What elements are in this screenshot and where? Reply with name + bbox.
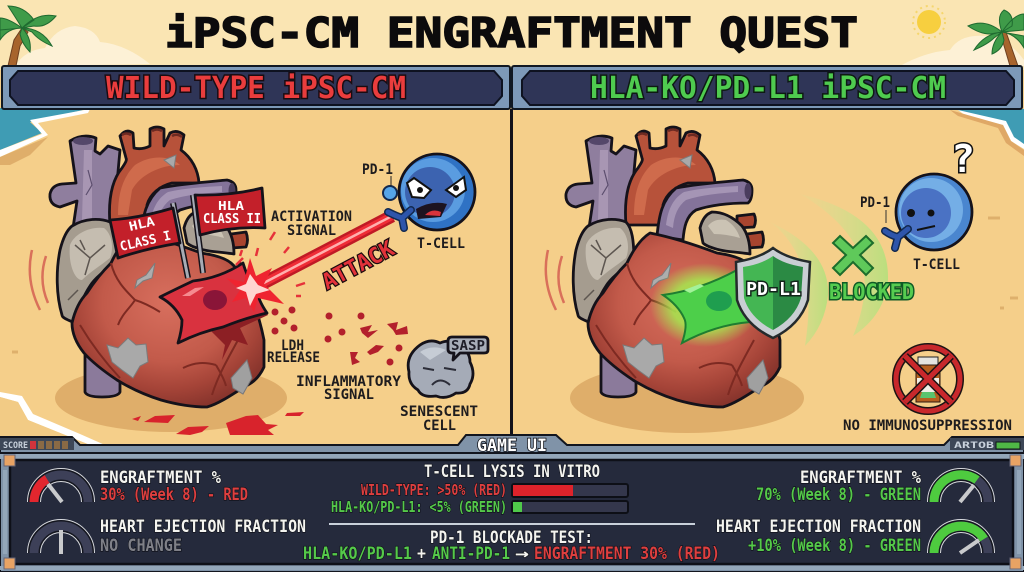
label: senescent cell: CELL (423, 418, 456, 434)
title: iPSC-CM ENGRAFTMENT QUEST (165, 9, 858, 57)
divider (329, 523, 695, 525)
text: engraftment HLA-KO (756, 468, 922, 505)
PD-1 blockade test: ANTI-PD-1 (432, 544, 510, 564)
text: engraftment wild-type: 30% (Week 8) - RED (100, 485, 248, 505)
tab: game UI: GAME UI (477, 436, 547, 456)
green shield waves (770, 194, 888, 346)
gauge: engraftment wild-type (34, 475, 88, 502)
senescent cell with SASP bubble (408, 337, 488, 397)
label: LDH release: LDH (281, 338, 304, 354)
ground shadow (55, 364, 287, 432)
label: senescent cell (400, 404, 478, 434)
label: PD-1: PD-1 (860, 195, 890, 211)
HLA flags: CLASS I (119, 229, 173, 255)
panel: HLA-KO/PD-L1 scene (546, 127, 1012, 434)
text: ejection fraction wild-type (100, 517, 306, 556)
HLA flags: CLASS II (203, 212, 261, 227)
red splats (132, 412, 304, 435)
HLA flags: HLA (218, 198, 245, 213)
PD-1 blockade test (303, 528, 720, 564)
heading: HLA-KO/PD-L1 iPSC-CM: HLA-KO/PD-L1 iPSC-CM (590, 71, 946, 106)
T-cell: angry (383, 154, 475, 230)
text: engraftment HLA-KO: ENGRAFTMENT % (800, 468, 922, 488)
text: engraftment wild-type (100, 468, 248, 505)
UI frame (0, 435, 1024, 572)
gauge: engraftment HLA-KO (934, 475, 988, 502)
score indicator (3, 441, 68, 451)
damaged red cardiomyocyte (160, 263, 267, 343)
artoo indicator (954, 441, 1020, 451)
panel header: HLA-KO/PD-L1 (512, 66, 1022, 109)
label: activation signal: SIGNAL (287, 223, 336, 239)
gauge: ejection fraction wild-type (34, 526, 88, 554)
text: ejection fraction HLA-KO: +10% (Week 8) - GREEN (748, 536, 921, 556)
label: T-cell: T-CELL (417, 236, 465, 252)
panel: wild-type scene (30, 127, 488, 435)
lysis chart (331, 462, 628, 516)
senescent cell with SASP bubble: SASP (451, 339, 485, 354)
PD-1 blockade test: PD-1 BLOCKADE TEST: (430, 528, 593, 548)
heart: healed (546, 127, 780, 407)
text: ejection fraction HLA-KO: HEART EJECTION FRACTION (716, 517, 921, 537)
label: inflammatory signal: INFLAMMATORY (296, 374, 402, 390)
label: no immunosuppression: NO IMMUNOSUPPRESSION (843, 418, 1012, 434)
label: LDH release: RELEASE (267, 350, 320, 366)
game UI panel (0, 435, 1024, 572)
panel divider (510, 109, 513, 436)
question mark: ? (951, 137, 975, 181)
PD-1 blockade test: + (417, 544, 426, 564)
attack label: ATTACK (318, 236, 399, 295)
ground shadow (570, 363, 804, 433)
LDH and inflammatory particles (272, 306, 408, 366)
PD-1 blockade test: ENGRAFTMENT 30% (RED) (534, 544, 720, 564)
palm tree left (0, 6, 56, 66)
lysis chart: WILD-TYPE: >50% (RED) (361, 481, 507, 499)
lysis chart: T-CELL LYSIS IN VITRO (424, 462, 600, 482)
heart: damaged (30, 127, 264, 407)
green cardiomyocyte (650, 263, 760, 347)
green X (833, 236, 873, 275)
PD-1 blockade test: HLA-KO/PD-L1 (303, 544, 412, 564)
T-cell: confused (885, 174, 972, 250)
heading: wild-type iPSC-CM: WILD-TYPE iPSC-CM (106, 71, 406, 106)
attack beam (226, 216, 392, 312)
label: activation signal (271, 209, 352, 239)
HLA flags (110, 188, 265, 278)
label: PD-1: PD-1 (362, 162, 393, 178)
text: engraftment wild-type: ENGRAFTMENT % (100, 468, 222, 488)
palm tree right (968, 10, 1024, 66)
label: activation signal: ACTIVATION (271, 209, 352, 225)
burn damage around cell (175, 260, 268, 360)
label: T-cell: T-CELL (913, 257, 960, 273)
label: inflammatory signal: SIGNAL (324, 387, 374, 403)
PD-L1 shield (736, 248, 810, 338)
label: LDH release (267, 338, 320, 366)
artoo indicator: ARTOB (954, 441, 995, 451)
text: ejection fraction wild-type: HEART EJECTION FRACTION (100, 517, 306, 537)
panel header: wild-type (2, 66, 510, 109)
gauge: ejection fraction HLA-KO (934, 526, 988, 553)
sun (913, 6, 945, 38)
score indicator: SCORE (3, 441, 28, 451)
text: ejection fraction wild-type: NO CHANGE (100, 536, 182, 556)
HLA flags: HLA (127, 213, 157, 234)
label: senescent cell: SENESCENT (400, 404, 478, 420)
lysis chart: HLA-KO/PD-L1: <5% (GREEN) (331, 498, 507, 516)
text: engraftment HLA-KO: 70% (Week 8) - GREEN (756, 485, 921, 505)
label: blocked: BLOCKED (829, 280, 914, 304)
label: inflammatory signal (296, 374, 402, 403)
PD-L1 shield: PD-L1 (746, 279, 801, 300)
icon: no immunosuppression (896, 347, 960, 411)
text: ejection fraction HLA-KO (716, 517, 921, 556)
PD-1 blockade test: → (515, 544, 529, 564)
